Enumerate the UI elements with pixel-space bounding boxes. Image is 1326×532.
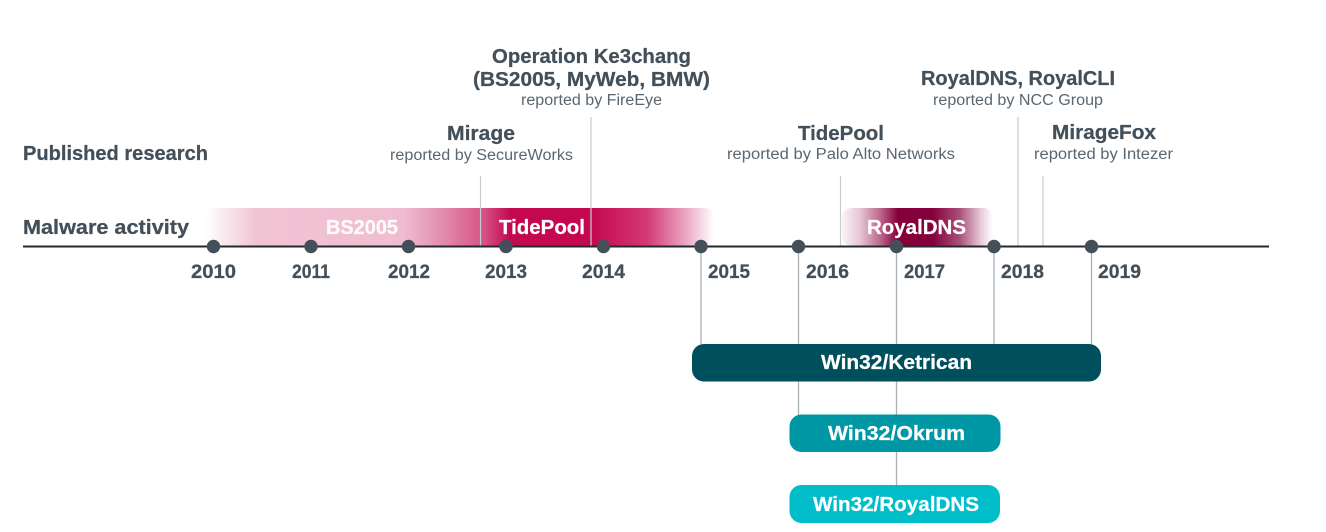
- year markers: [207, 240, 1098, 253]
- year labels: 2015: [708, 262, 750, 283]
- report: TidePool: TidePool: [798, 123, 884, 145]
- year labels: 2016: [806, 262, 849, 283]
- malware bar: Win32/RoyalDNS: [790, 485, 1000, 523]
- report: Operation Ke3chang: [473, 46, 710, 109]
- report: Operation Ke3chang: reported by FireEye: [521, 92, 662, 109]
- report: Operation Ke3chang: Operation Ke3chang: [492, 46, 691, 68]
- row heading: Published research: Published research: [23, 143, 208, 165]
- report: MirageFox: reported by Intezer: [1034, 146, 1173, 163]
- report: Mirage: Mirage: [447, 123, 515, 145]
- report: RoyalDNS, RoyalCLI: RoyalDNS, RoyalCLI: [921, 68, 1115, 90]
- report: Operation Ke3chang: (BS2005, MyWeb, BMW): [473, 69, 710, 91]
- label: TidePool: TidePool: [499, 217, 585, 239]
- report: TidePool: reported by Palo Alto Networks: [727, 146, 955, 163]
- malware family connector stems: [701, 246, 1092, 485]
- year labels: 2010: [191, 262, 236, 283]
- report: RoyalDNS, RoyalCLI: [921, 68, 1115, 109]
- timeline axis: [23, 246, 1269, 248]
- report: TidePool: [727, 123, 955, 163]
- year labels: [191, 262, 1141, 283]
- research leader lines: [480, 117, 1043, 246]
- year labels: 2019: [1098, 262, 1141, 283]
- report: RoyalDNS, RoyalCLI: reported by NCC Group: [933, 92, 1103, 109]
- activity band: BS2005 and TidePool: [205, 208, 714, 246]
- report: Mirage: reported by SecureWorks: [390, 147, 573, 164]
- row heading: Malware activity: Malware activity: [23, 217, 190, 239]
- malware bar: Win32/Okrum: [790, 414, 1000, 452]
- year labels: 2013: [485, 262, 527, 283]
- year labels: 2018: [1001, 262, 1044, 283]
- malware bar: Win32/RoyalDNS: Win32/RoyalDNS: [813, 494, 979, 516]
- report: MirageFox: [1034, 122, 1173, 163]
- year labels: 2017: [904, 262, 945, 283]
- year labels: 2014: [582, 262, 625, 283]
- year labels: 2012: [388, 262, 430, 283]
- malware bar: Win32/Okrum: Win32/Okrum: [828, 423, 965, 445]
- activity band: RoyalDNS: [842, 208, 993, 246]
- malware bar: Win32/Ketrican: Win32/Ketrican: [821, 352, 972, 374]
- label: BS2005: BS2005: [326, 217, 398, 239]
- year labels: 2011: [292, 262, 330, 283]
- label: RoyalDNS: RoyalDNS: [867, 217, 966, 239]
- report: Mirage: [390, 123, 573, 164]
- malware bar: Win32/Ketrican: [692, 344, 1101, 382]
- report: MirageFox: MirageFox: [1052, 122, 1156, 144]
